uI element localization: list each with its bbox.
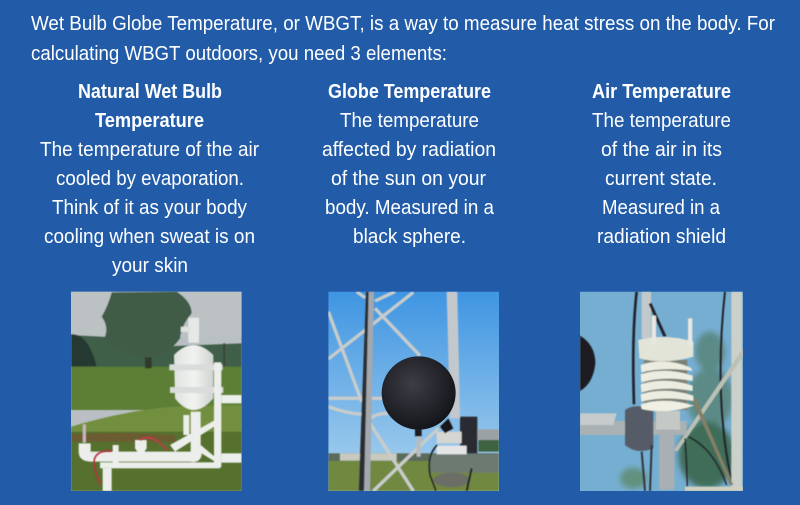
description: globe temperature: black sphere. [353,226,466,248]
description: air temperature: current state. [605,168,717,190]
description: natural wet bulb: The temperature of the air [40,139,259,161]
heading: air temperature: Air Temperature [592,81,731,103]
intro text: Wet Bulb Globe Temperature, or WBGT, is a way to measure heat stress on the body. For [31,13,775,35]
description: natural wet bulb: your skin [112,255,188,277]
description: air temperature: of the air in its [601,139,722,161]
description: air temperature: The temperature [592,110,731,132]
column: globe temperature [322,81,496,248]
heading: natural wet bulb: Natural Wet Bulb [78,81,222,103]
description: air temperature: Measured in a [602,197,721,219]
description: natural wet bulb: Think of it as your body [52,197,247,219]
description: globe temperature: body. Measured in a [325,197,495,219]
description: globe temperature: affected by radiation [322,139,496,161]
photo: black globe thermometer [328,292,499,491]
description: natural wet bulb: cooled by evaporation. [56,168,244,190]
column: air temperature [592,81,731,248]
photo: radiation shield air sensor [580,292,743,491]
description: globe temperature [322,110,496,248]
description: air temperature: radiation shield [597,226,726,248]
photo: natural wet bulb instrument [71,292,242,491]
heading: natural wet bulb [78,81,222,132]
description: air temperature [592,110,731,248]
intro text: calculating WBGT outdoors, you need 3 elements: [31,43,447,65]
heading: globe temperature: Globe Temperature [328,81,491,103]
description: globe temperature: The temperature [340,110,479,132]
description: globe temperature: of the sun on your [331,168,486,190]
column: natural wet bulb temperature [40,81,259,277]
intro text [31,13,775,65]
heading: natural wet bulb: Temperature [95,110,204,132]
description: natural wet bulb [40,139,259,277]
description: natural wet bulb: cooling when sweat is on [44,226,255,248]
